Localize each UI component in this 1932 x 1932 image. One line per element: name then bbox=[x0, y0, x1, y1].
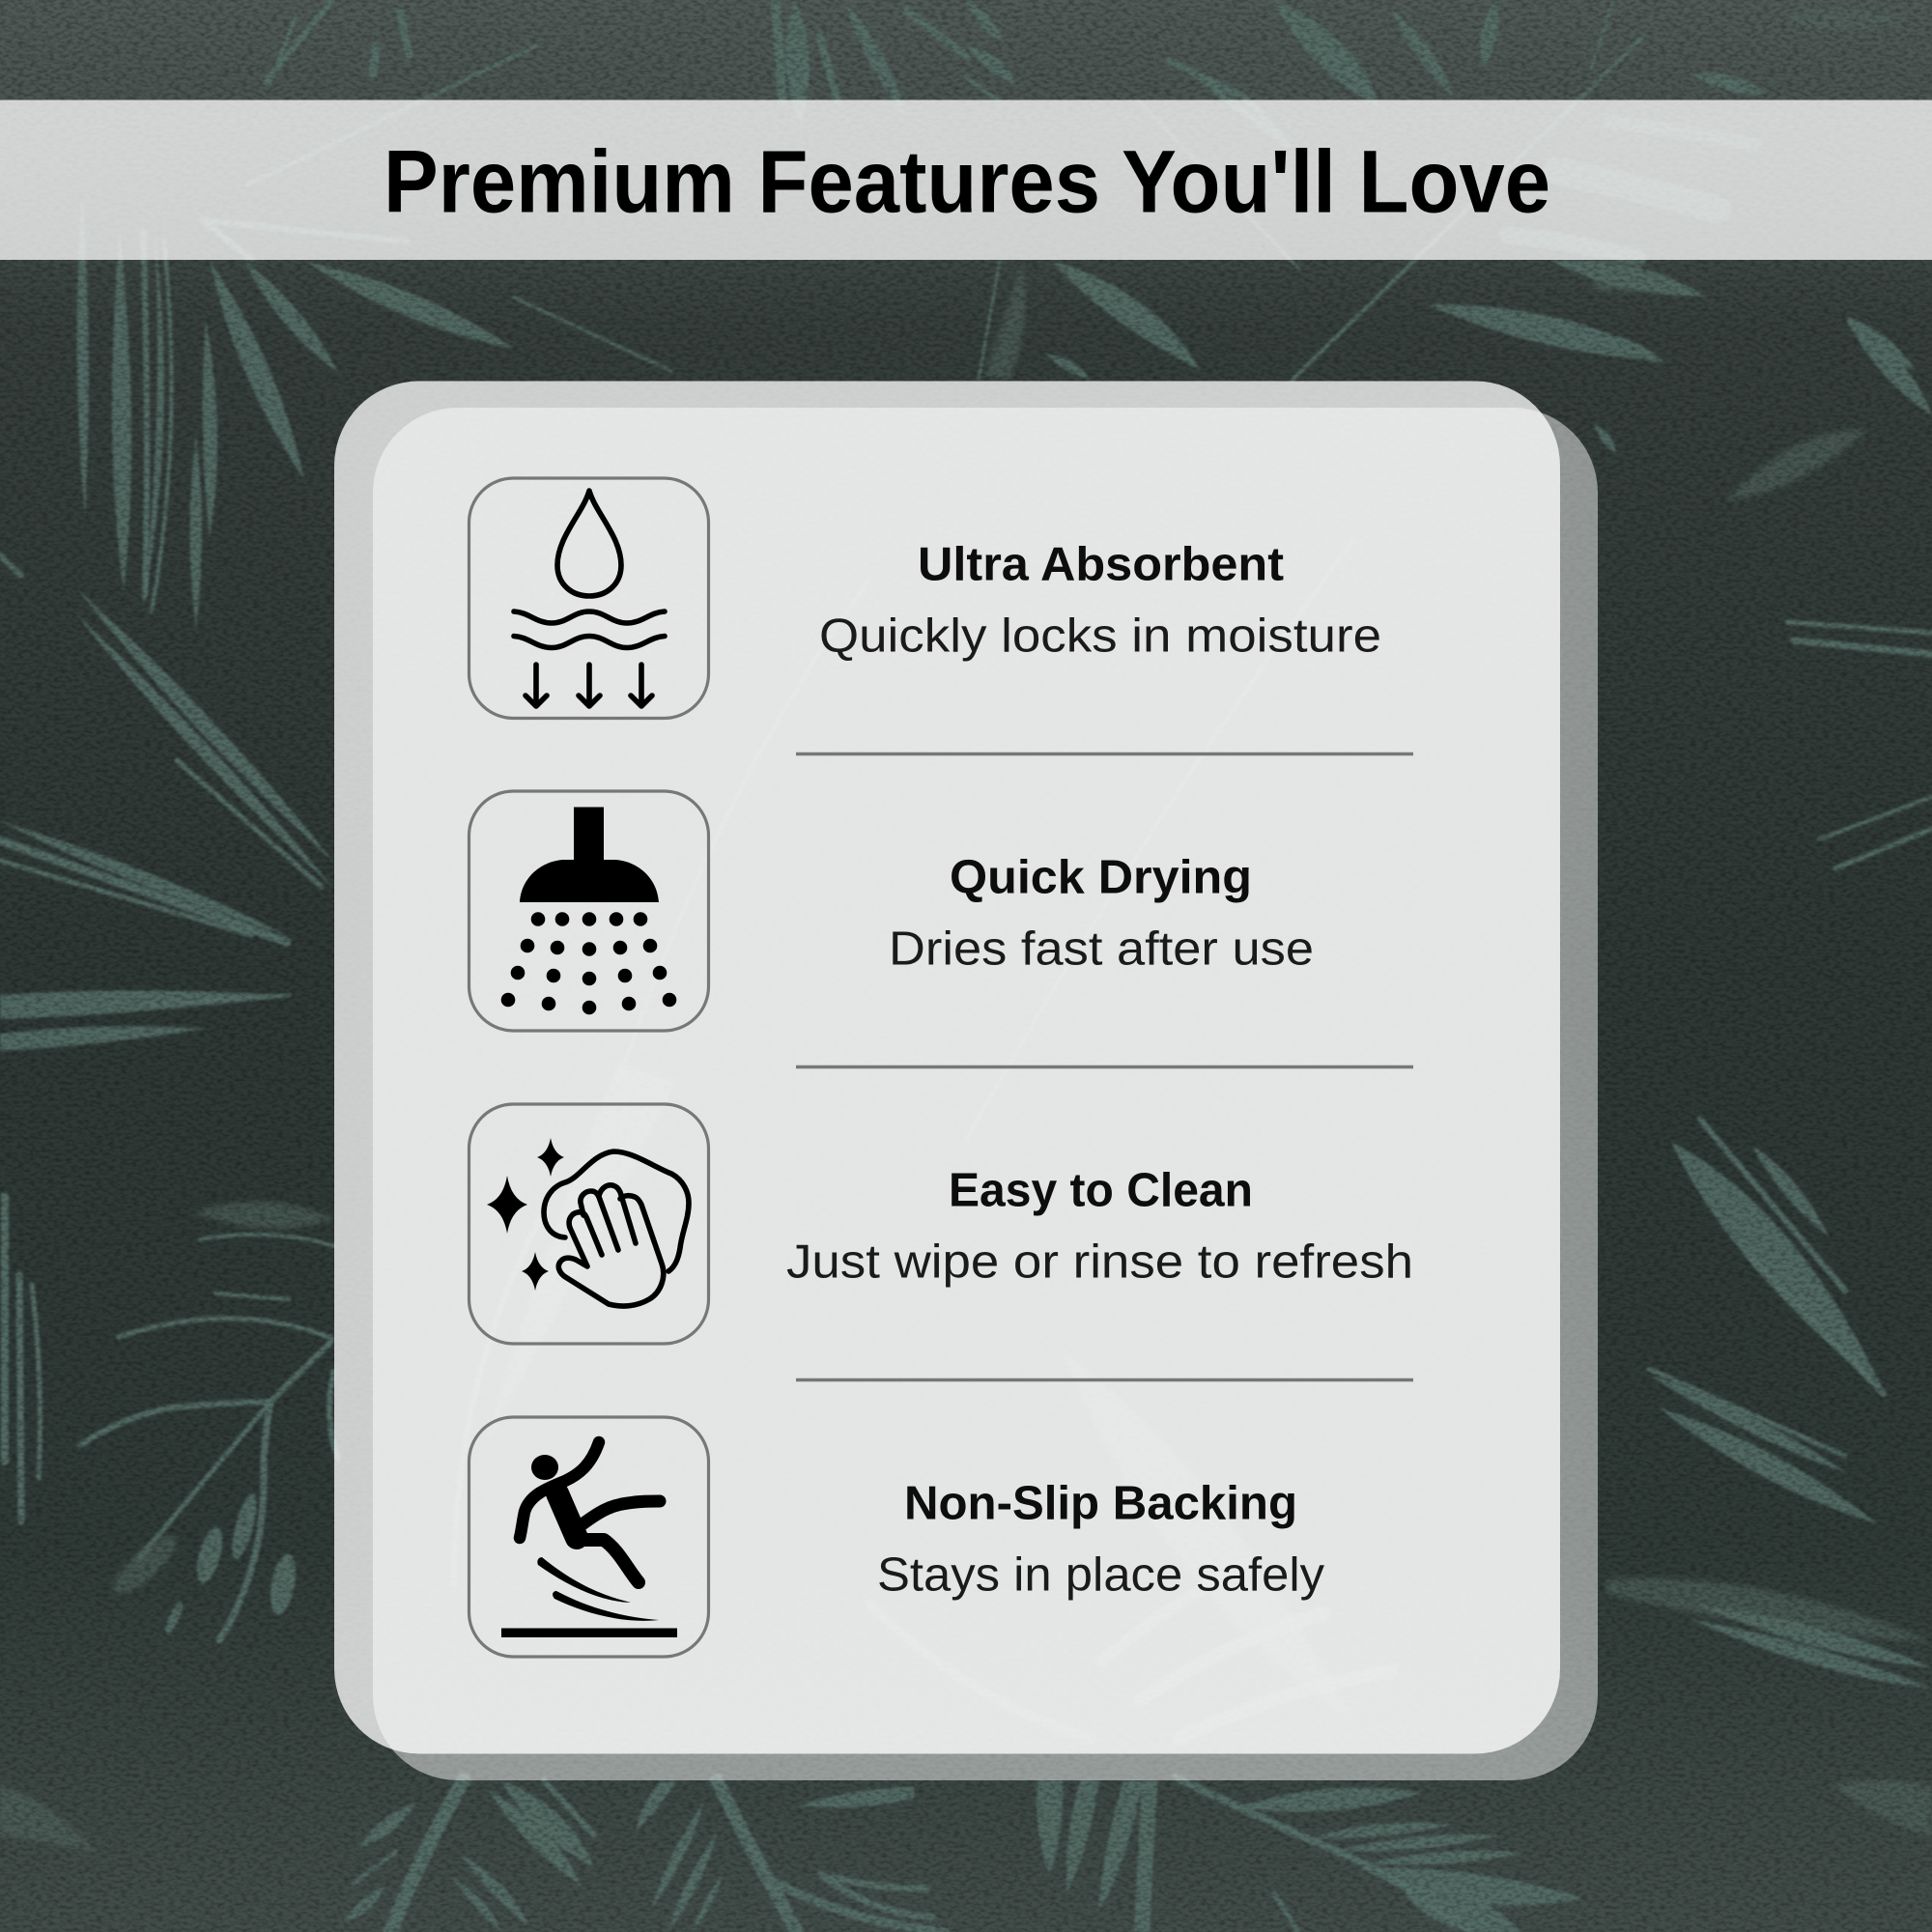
row: non-slip backing bbox=[469, 1417, 1325, 1657]
header band bbox=[0, 100, 1932, 260]
card front layer bbox=[373, 408, 1598, 1780]
icon: person slipping bbox=[469, 1417, 709, 1657]
title: Premium Features You'll Love bbox=[384, 133, 1550, 232]
row: quick drying bbox=[469, 791, 1314, 1031]
row: easy to clean bbox=[469, 1104, 1413, 1344]
description: Dries fast after use bbox=[889, 923, 1314, 976]
row: ultra absorbent bbox=[469, 478, 1381, 719]
heading: Non-Slip Backing bbox=[904, 1478, 1297, 1530]
heading: Quick Drying bbox=[950, 852, 1252, 904]
icon: water drop absorbing bbox=[469, 478, 709, 719]
card back layer bbox=[334, 381, 1560, 1754]
description: Stays in place safely bbox=[877, 1549, 1325, 1602]
description: Just wipe or rinse to refresh bbox=[786, 1236, 1413, 1289]
heading: Easy to Clean bbox=[949, 1165, 1253, 1217]
icon: hand wiping with cloth and sparkles bbox=[469, 1104, 709, 1344]
heading: Ultra Absorbent bbox=[918, 539, 1284, 591]
description: Quickly locks in moisture bbox=[819, 611, 1381, 663]
panel: layered glass card bbox=[334, 381, 1598, 1780]
icon: shower head bbox=[469, 791, 709, 1031]
